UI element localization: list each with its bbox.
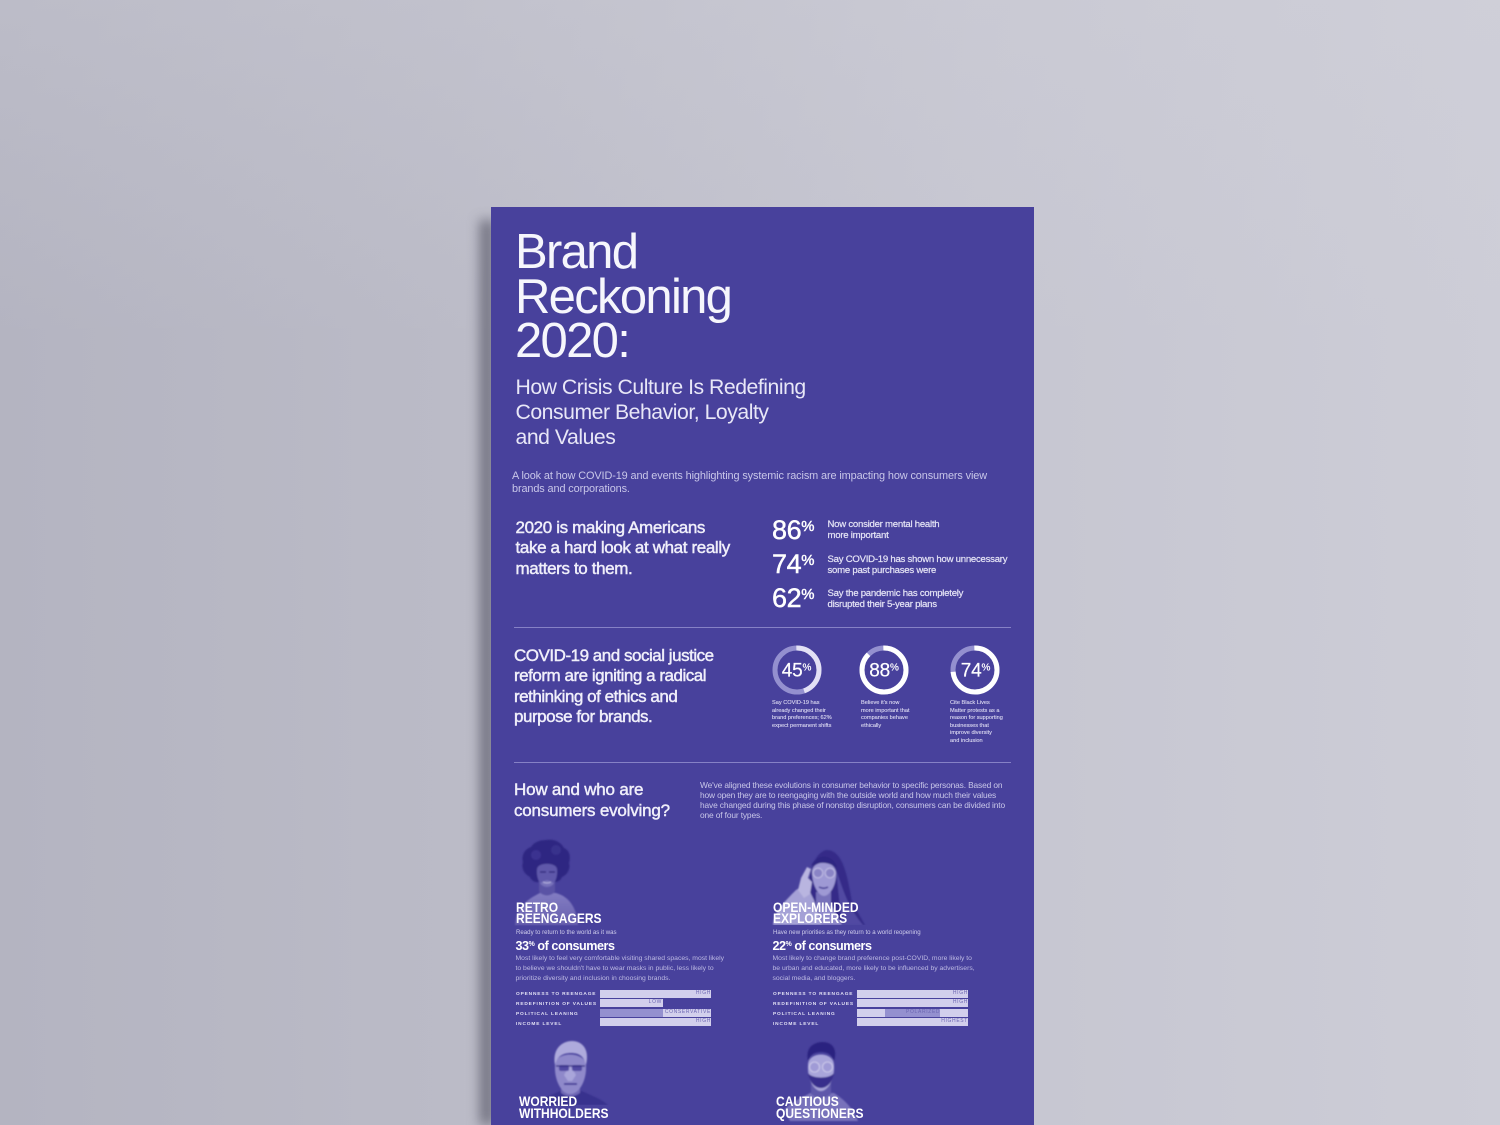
persona description: to believe we shouldn't have to wear masks in public, less likely to — [516, 965, 714, 972]
persona metric bars: POLARIZED — [906, 1009, 940, 1015]
donut caption: 74 percent: reason for supporting — [950, 715, 1003, 721]
donut caption: 45 percent: expect permanent shifts — [772, 722, 831, 728]
donut: 88 percent — [860, 646, 908, 694]
persona metric bars: REDEFINITION OF VALUES — [516, 1002, 597, 1007]
intro text: A look at how COVID-19 and events highlighting systemic racism are impacting how consumers view — [512, 470, 987, 482]
persona: worried withholders — [519, 1040, 609, 1121]
persona intro text — [700, 780, 1005, 820]
persona metric bars: HIGH — [953, 990, 968, 996]
donut caption: 88 percent: Believe it's now — [861, 700, 899, 706]
heading: what matters: 2020 is making Americans — [516, 518, 705, 537]
persona metric bars: LOW — [649, 999, 662, 1005]
heading: what matters — [516, 518, 730, 578]
donut: 45 percent: % — [803, 662, 812, 674]
donut caption: 45 percent — [772, 700, 832, 728]
donut: 74 percent: 74 — [961, 660, 982, 682]
heading: ethics and purpose — [514, 646, 714, 726]
stat: 62 percent: disrupted their 5-year plans — [828, 599, 937, 610]
persona: retro reengagers — [514, 839, 724, 1027]
heading: what matters: take a hard look at what really — [516, 538, 730, 557]
persona intro text: one of four types. — [700, 810, 762, 820]
persona name: WITHHOLDERS — [519, 1106, 609, 1121]
subtitle: How Crisis Culture Is Redefining — [516, 376, 806, 398]
donut caption: 88 percent: more important that — [861, 708, 910, 714]
persona metric bars — [516, 990, 711, 1027]
donut: 88 percent: 88 — [869, 660, 890, 682]
title: 2020: — [515, 314, 629, 368]
stat: 86 percent: more important — [828, 530, 889, 541]
persona name: EXPLORERS — [773, 911, 847, 926]
heading: how and who — [514, 780, 670, 820]
donut caption: 74 percent: businesses that — [950, 722, 989, 728]
persona name: RETRO — [516, 900, 558, 914]
donut caption: 74 percent: and inclusion — [950, 738, 983, 744]
persona tagline: Ready to return to the world as it was — [516, 928, 617, 936]
subtitle: and Values — [516, 426, 615, 448]
persona metric bars: HIGHEST — [941, 1018, 968, 1024]
donut caption: 74 percent — [950, 700, 1003, 744]
persona description: Most likely to change brand preference post-COVID, more likely to — [772, 955, 972, 962]
portrait: bearded man with glasses — [784, 1042, 858, 1122]
stat: 74 percent: Say COVID-19 has shown how unnecessary — [828, 554, 1007, 565]
donut caption: 45 percent: Say COVID-19 has — [772, 700, 820, 706]
persona metric bars: INCOME LEVEL — [516, 1022, 562, 1027]
persona: open-minded explorers — [772, 850, 975, 1027]
persona name: OPEN-MINDED — [773, 900, 859, 914]
persona share: 33% of consumers — [516, 939, 615, 953]
persona metric bars: HIGH — [696, 1018, 711, 1024]
donut: 45 percent: 45 — [782, 660, 803, 682]
stat: 62 percent: 62% — [772, 583, 814, 613]
portrait: woman with curly hair — [514, 839, 578, 926]
donut caption: 88 percent: companies behave — [861, 715, 908, 721]
subtitle — [516, 376, 806, 448]
persona metric bars — [773, 990, 968, 1027]
persona name: CAUTIOUS — [776, 1094, 839, 1109]
donut caption: 45 percent: brand preferences; 62% — [772, 715, 832, 721]
persona metric bars: OPENNESS TO REENGAGE — [773, 992, 853, 997]
heading: ethics and purpose: purpose for brands. — [514, 707, 652, 726]
stat: 74 percent: 74% — [772, 549, 814, 579]
persona metric bars: CONSERVATIVE — [665, 1009, 711, 1015]
title: Brand — [515, 225, 637, 279]
persona metric bars: INCOME LEVEL — [773, 1022, 819, 1027]
intro text: brands and corporations. — [512, 482, 630, 494]
persona metric bars: OPENNESS TO REENGAGE — [516, 992, 596, 997]
subtitle: Consumer Behavior, Loyalty — [516, 400, 769, 424]
portrait: older man with glasses — [534, 1040, 606, 1105]
donut caption: 45 percent: already changed their — [772, 708, 826, 714]
stat: 62 percent — [772, 583, 964, 613]
persona metric bars: REDEFINITION OF VALUES — [773, 1002, 854, 1007]
stat: 74 percent — [772, 549, 1008, 579]
persona name — [519, 1094, 609, 1121]
persona name: QUESTIONERS — [776, 1106, 864, 1121]
persona description — [772, 955, 975, 982]
persona name — [516, 900, 602, 926]
persona metric bars: HIGH — [696, 990, 711, 996]
donut: 74 percent — [950, 646, 1000, 694]
title: Reckoning — [515, 270, 731, 324]
persona: cautious questioners — [776, 1042, 864, 1122]
persona intro text: have changed during this phase of nonstop disruption, consumers can be divided into — [700, 800, 1005, 810]
persona description: Most likely to feel very comfortable visiting shared spaces, most likely — [516, 955, 724, 962]
heading: ethics and purpose: COVID-19 and social justice — [514, 646, 714, 665]
heading: what matters: matters to them. — [516, 559, 632, 578]
heading: how and who: consumers evolving? — [514, 801, 670, 820]
stat: 86 percent: Now consider mental health — [828, 519, 939, 530]
donut: 74 percent: % — [982, 662, 991, 674]
persona intro text: how open they are to reengaging with the outside world and how much their values — [700, 790, 996, 800]
persona name — [773, 900, 859, 926]
stat: 74 percent: some past purchases were — [828, 565, 936, 576]
stat: 62 percent: Say the pandemic has completely — [828, 588, 963, 599]
persona tagline: Have new priorities as they return to a world reopening — [773, 928, 921, 936]
persona name — [776, 1094, 864, 1121]
persona share: 22% of consumers — [772, 939, 872, 953]
donut caption: 88 percent: ethically — [861, 722, 881, 728]
persona metric bars: POLITICAL LEANING — [516, 1012, 579, 1017]
persona metric bars: HIGH — [953, 999, 968, 1005]
stat: 86 percent — [772, 515, 940, 545]
persona description — [516, 955, 724, 982]
portrait: woman with glasses — [772, 850, 864, 925]
stat: 86 percent: 86% — [772, 515, 814, 545]
heading: ethics and purpose: rethinking of ethics and — [514, 687, 677, 706]
donut caption: 74 percent: Matter protests as a — [950, 708, 999, 714]
donut caption: 74 percent: Cite Black Lives — [950, 700, 990, 706]
donut caption: 74 percent: improve diversity — [950, 730, 992, 736]
persona description: be urban and educated, more likely to be influenced by advertisers, — [772, 965, 975, 972]
persona description: prioritize diversity and inclusion in choosing brands. — [516, 975, 670, 982]
donut: 88 percent: % — [890, 662, 899, 674]
donut caption: 88 percent — [861, 700, 910, 728]
heading: ethics and purpose: reform are igniting a radical — [514, 666, 706, 685]
donut: 45 percent — [772, 646, 822, 694]
persona description: social media, and bloggers. — [772, 975, 855, 982]
intro text — [512, 470, 988, 494]
persona metric bars: POLITICAL LEANING — [773, 1012, 836, 1017]
heading: how and who: How and who are — [514, 780, 643, 799]
title — [515, 225, 731, 368]
panel: poster — [491, 207, 1034, 1125]
persona intro text: We've aligned these evolutions in consumer behavior to specific personas. Based on — [700, 780, 1002, 790]
persona name: WORRIED — [519, 1094, 577, 1109]
persona name: REENGAGERS — [516, 911, 602, 926]
